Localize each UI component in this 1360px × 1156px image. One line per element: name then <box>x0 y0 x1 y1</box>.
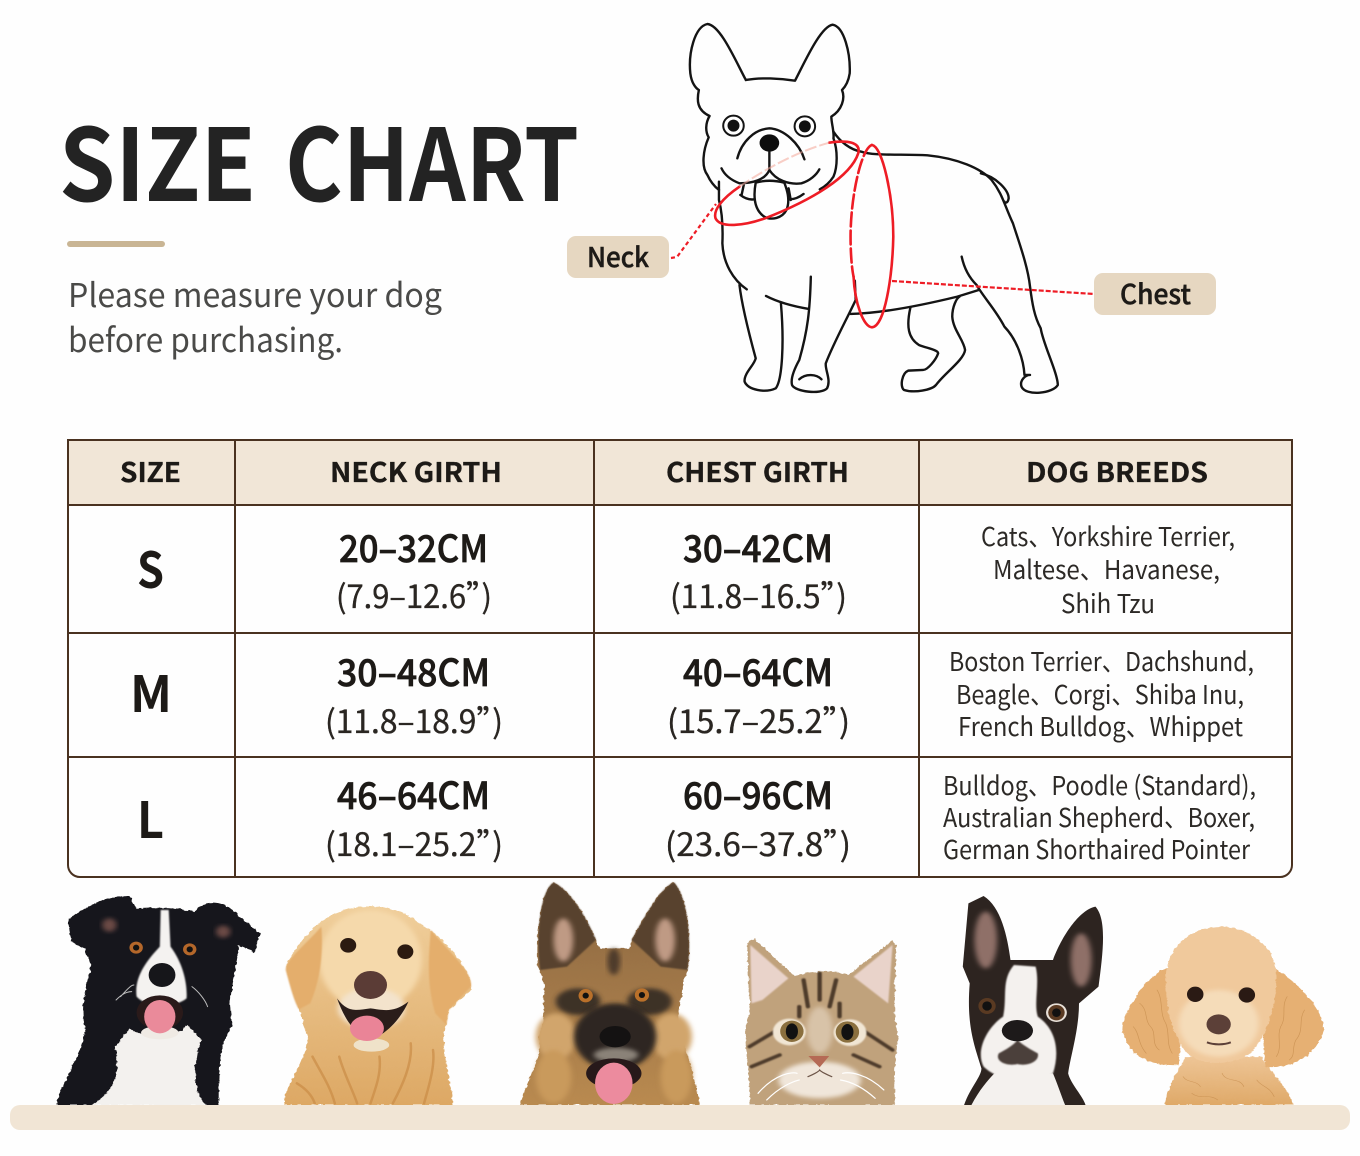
title: SIZE <box>59 85 256 230</box>
chest girth loop <box>851 145 893 327</box>
table header row: CHEST GIRTH <box>666 451 849 490</box>
pets row <box>56 883 1324 1105</box>
row: size L: Australian Shepherd、Boxer, <box>943 798 1255 835</box>
row: size M: French Bulldog、Whippet <box>958 707 1243 744</box>
neck label: Neck <box>587 236 649 275</box>
table header row: SIZE <box>120 451 181 490</box>
illustration: boston terrier <box>963 896 1103 1105</box>
table frame and grid <box>68 440 1292 877</box>
row: size S: Shih Tzu <box>1061 584 1155 621</box>
chest leader line <box>892 281 1094 294</box>
neck girth loop <box>715 142 859 225</box>
subtitle: Please measure your dog <box>68 269 442 317</box>
illustration: toy poodle <box>1122 927 1324 1105</box>
row: size S: 20–32CM <box>339 519 488 573</box>
row: size M: M <box>130 655 172 727</box>
illustration: tabby kitten <box>745 938 898 1105</box>
row: size S: S <box>137 531 164 603</box>
row: size S: (7.9–12.6”) <box>336 572 492 618</box>
table header background <box>68 440 1292 505</box>
table header row: NECK GIRTH <box>330 451 502 490</box>
neck leader line <box>671 204 716 258</box>
row: size L: (23.6–37.8”) <box>665 820 851 866</box>
row: size S <box>137 517 1235 621</box>
row: size L: 46–64CM <box>337 766 490 820</box>
illustration: german shepherd <box>520 883 700 1105</box>
row: size S: 30–42CM <box>683 519 833 573</box>
dog measuring diagram <box>567 24 1216 393</box>
row: size L: Bulldog、Poodle (Standard), <box>943 766 1256 803</box>
row: size L: 60–96CM <box>683 766 833 820</box>
row: size M: (11.8–18.9”) <box>325 697 503 743</box>
table header row <box>120 451 1208 490</box>
eyes <box>723 116 815 136</box>
row: size M: Beagle、Corgi、Shiba Inu, <box>956 675 1244 712</box>
neck label <box>567 236 669 278</box>
chest label: Chest <box>1120 273 1191 312</box>
row: size L: German Shorthaired Pointer <box>943 830 1251 867</box>
row: size L: L <box>137 781 164 853</box>
row: size S: Cats、Yorkshire Terrier, <box>981 517 1235 554</box>
illustration: golden retriever <box>283 906 471 1105</box>
nose and mouth <box>722 128 819 219</box>
dog line drawing <box>690 24 1058 393</box>
row: size S: (11.8–16.5”) <box>670 572 847 618</box>
shelf bar <box>10 1105 1350 1130</box>
chest label <box>1094 273 1216 315</box>
row: size M: 40–64CM <box>683 643 833 697</box>
row: size L <box>137 766 1256 867</box>
row: size M <box>130 642 1254 744</box>
subtitle <box>68 269 442 362</box>
size table <box>68 440 1292 877</box>
accent rule <box>67 241 165 247</box>
table header row: DOG BREEDS <box>1026 451 1208 490</box>
illustration: border collie <box>56 896 260 1105</box>
row: size S: Maltese、Havanese, <box>993 550 1220 587</box>
row: size M: Boston Terrier、Dachshund, <box>949 642 1254 679</box>
row: size M: (15.7–25.2”) <box>667 697 850 743</box>
subtitle: before purchasing. <box>68 314 343 362</box>
title: CHART <box>285 85 579 230</box>
row: size L: (18.1–25.2”) <box>325 820 503 866</box>
title <box>59 85 579 230</box>
row: size M: 30–48CM <box>337 643 490 697</box>
